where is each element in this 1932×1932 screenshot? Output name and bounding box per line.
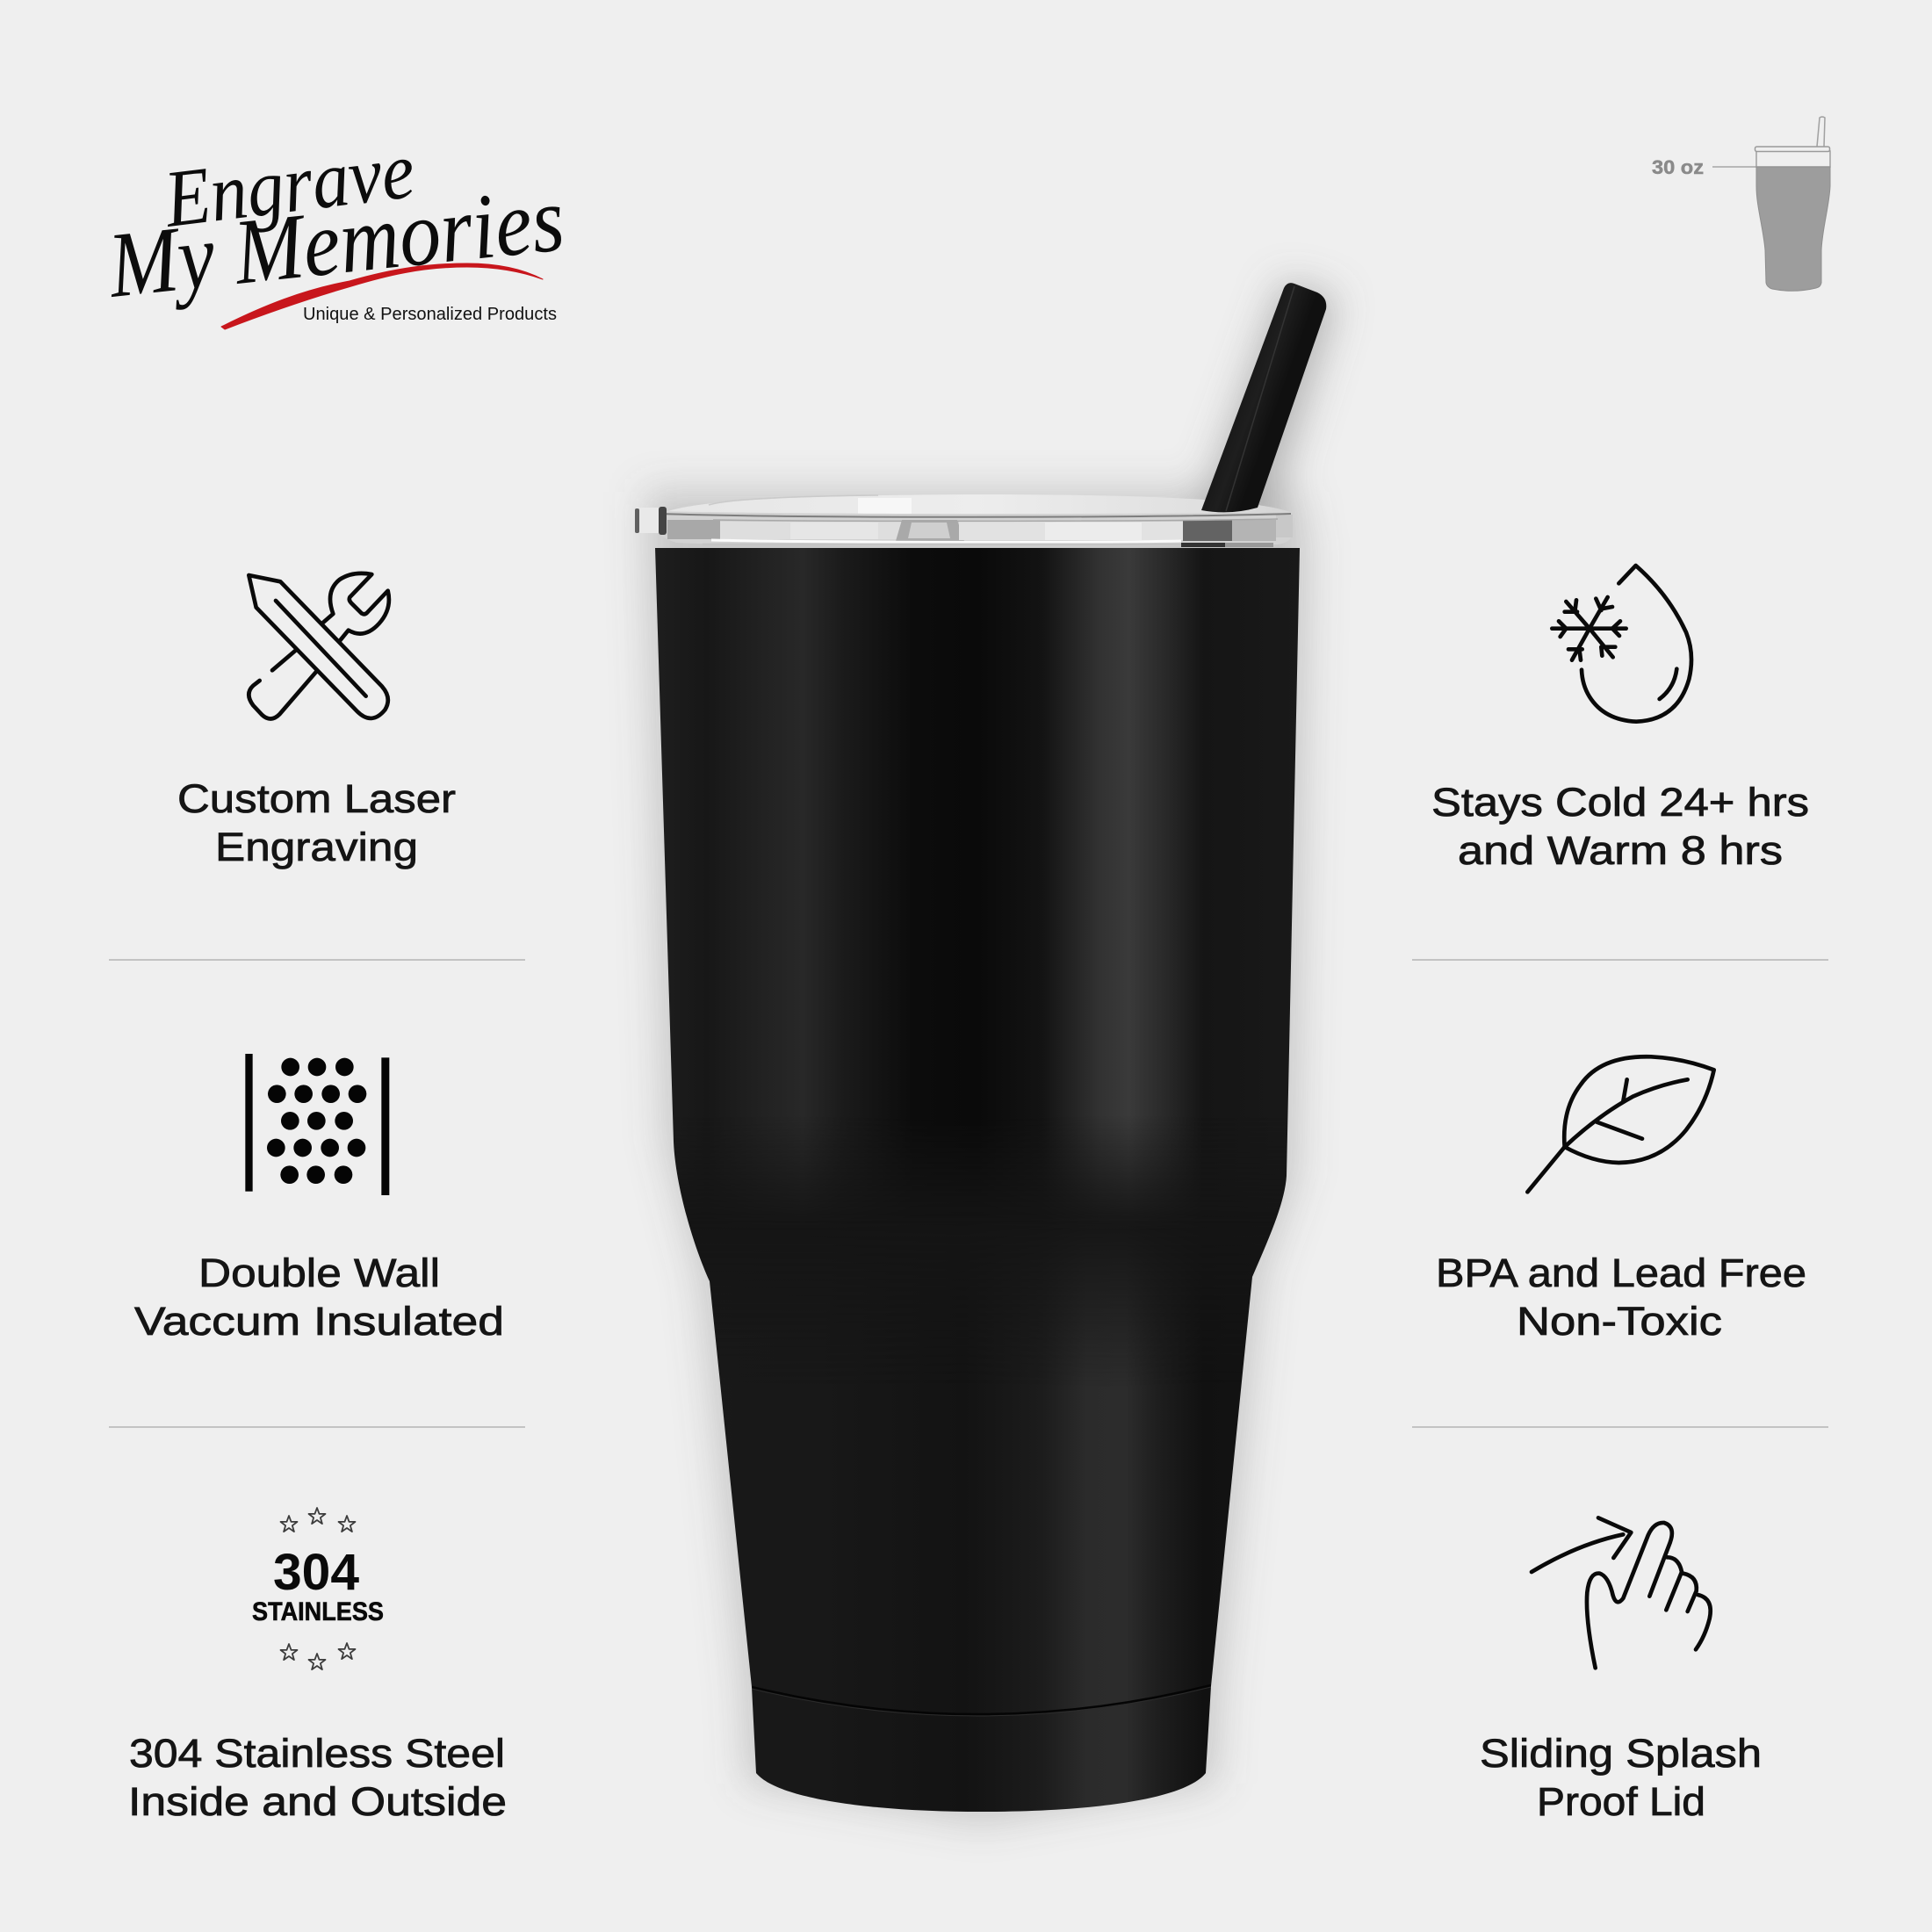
logo tagline: Unique & Personalized Products	[303, 305, 557, 324]
lid top surface	[663, 494, 1293, 520]
caption: Engraving	[215, 825, 418, 869]
caption: BPA and Lead Free	[1436, 1251, 1806, 1295]
icon: 304 stainless badge	[252, 1508, 384, 1669]
icon: swipe hand with arrow	[1532, 1517, 1711, 1668]
caption	[177, 776, 456, 869]
feature: custom laser engraving	[177, 573, 456, 869]
logo script: My Memories: My Memories	[102, 167, 569, 317]
icon: leaf	[1527, 1056, 1714, 1192]
lower section highlight	[1045, 1277, 1161, 1711]
caption	[1480, 1731, 1762, 1824]
tumbler shadow	[645, 281, 1337, 1822]
capacity diagram: 30 oz	[1652, 117, 1830, 291]
feature: stays cold and warm	[1431, 566, 1809, 873]
upper section highlights	[655, 548, 1188, 1203]
lid rim band	[659, 511, 1293, 547]
icon: water drop with snowflake	[1552, 566, 1691, 722]
logo script: Engrave: Engrave	[158, 125, 419, 244]
straw	[1201, 283, 1326, 512]
icon: insulated wall dots	[245, 1054, 389, 1195]
caption: Vaccum Insulated	[134, 1299, 504, 1344]
feature: BPA and lead free	[1436, 1056, 1806, 1344]
badge number: 304	[273, 1544, 359, 1601]
caption: Stays Cold 24+ hrs	[1431, 780, 1809, 825]
lid tab	[635, 507, 667, 535]
base ring	[752, 1685, 1211, 1818]
tumbler body	[641, 544, 1317, 1844]
badge word: STAINLESS	[252, 1597, 384, 1626]
icon: crossed tools	[249, 573, 389, 719]
caption: Double Wall	[198, 1251, 440, 1295]
divider	[1412, 959, 1828, 961]
caption	[134, 1251, 504, 1344]
caption	[1436, 1251, 1806, 1344]
caption: 304 Stainless Steel	[129, 1731, 505, 1776]
logo swoosh	[221, 263, 543, 329]
caption: Non-Toxic	[1517, 1299, 1722, 1344]
divider	[109, 1426, 525, 1428]
feature: double wall vacuum insulated	[134, 1054, 504, 1344]
logo: Engrave My Memories	[102, 125, 569, 329]
divider	[1412, 1426, 1828, 1428]
caption	[128, 1731, 507, 1824]
capacity label: 30 oz	[1652, 156, 1704, 178]
feature: sliding splash proof lid	[1480, 1517, 1762, 1824]
caption: Proof Lid	[1537, 1779, 1705, 1824]
lid	[635, 494, 1293, 547]
caption	[1431, 780, 1809, 873]
capacity leader line	[1712, 166, 1756, 168]
feature: 304 stainless steel	[128, 1508, 507, 1824]
caption: Inside and Outside	[128, 1779, 507, 1824]
caption: Custom Laser	[177, 776, 456, 821]
divider	[109, 959, 525, 961]
caption: and Warm 8 hrs	[1458, 828, 1783, 873]
product: black tumbler	[635, 283, 1326, 1844]
caption: Sliding Splash	[1480, 1731, 1762, 1776]
small tumbler outline	[1755, 117, 1830, 291]
stars	[281, 1508, 355, 1669]
